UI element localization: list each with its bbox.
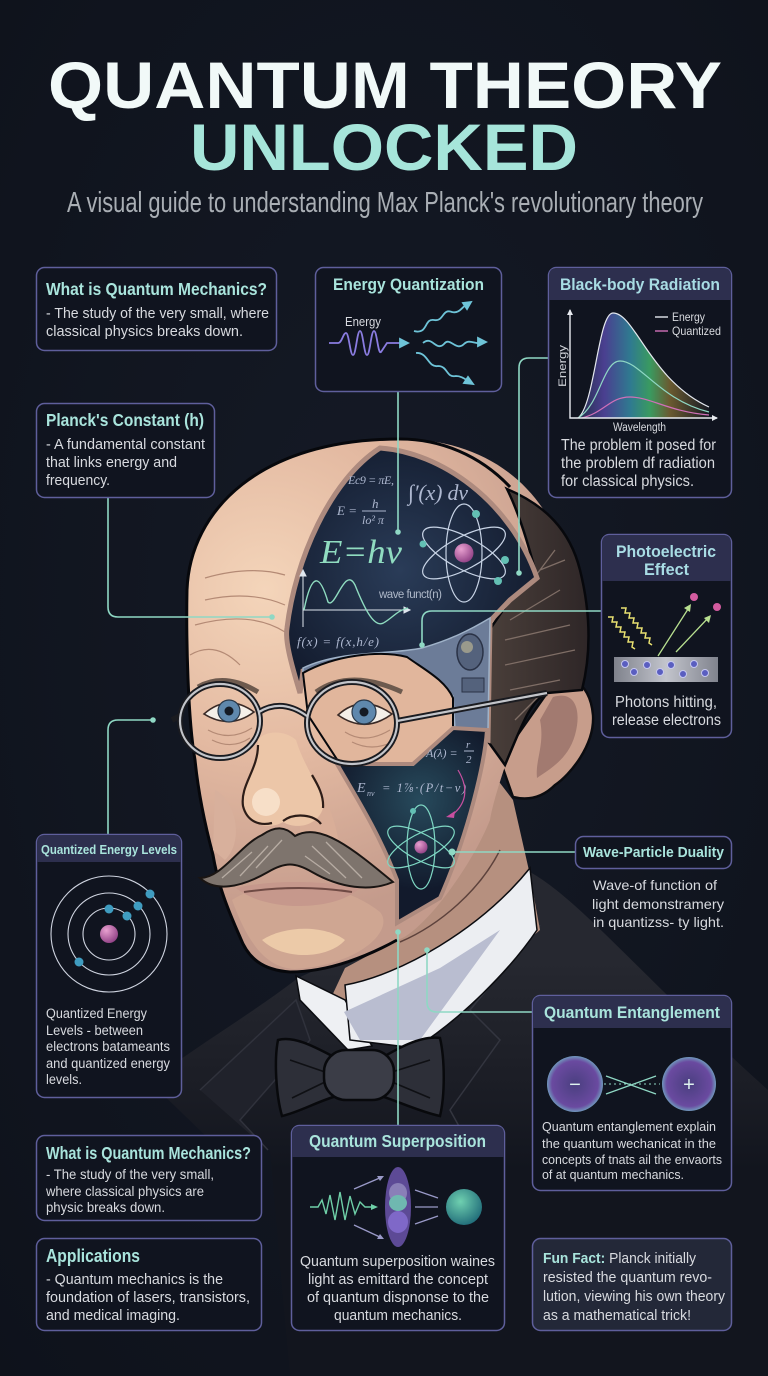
panel: Fun Fact: as a mathematical trick! bbox=[543, 1308, 691, 1324]
mouth bbox=[236, 882, 360, 906]
equations on chalkboard: ∫′(x) dv bbox=[406, 480, 468, 506]
panel: Fun Fact: Fun Fact: Planck initially bbox=[543, 1251, 697, 1267]
panel: Applications: foundation of lasers, transistors, bbox=[46, 1290, 250, 1306]
atom in jaw bbox=[382, 805, 460, 889]
icon: photons and plate bbox=[608, 593, 721, 682]
chart: radiation curves: Energy bbox=[557, 344, 569, 387]
panel: Applications: Applications bbox=[46, 1246, 140, 1266]
title bbox=[48, 48, 722, 184]
equations on chalkboard bbox=[297, 473, 474, 818]
panel: Fun Fact bbox=[532, 1238, 732, 1330]
equations on chalkboard: nν bbox=[367, 789, 375, 798]
head skin bbox=[187, 439, 562, 972]
panel: Quantum Entanglement: Quantum Entanglement bbox=[544, 1003, 720, 1022]
title: UNLOCKED bbox=[190, 110, 578, 184]
icon: atom orbits bbox=[51, 876, 167, 992]
panel: Quantized Energy Levels bbox=[36, 834, 182, 1098]
panel: Wave-Particle Duality bbox=[576, 836, 732, 868]
equations on chalkboard: E bbox=[356, 781, 366, 796]
chart: radiation curves: Wavelength bbox=[613, 422, 666, 434]
panel: Quantum Superposition: Quantum Superposition bbox=[309, 1131, 486, 1151]
connector lines bbox=[108, 358, 601, 1125]
panel: Photoelectric Effect: Effect bbox=[644, 560, 689, 579]
lower chalkboard bbox=[337, 728, 487, 923]
portrait of Max Planck bbox=[150, 439, 768, 1376]
panel: Quantized Energy Levels: Quantized Energy Levels bbox=[41, 843, 177, 857]
panel: Black-body Radiation bbox=[548, 268, 732, 498]
eyes bbox=[198, 680, 402, 747]
panel: Quantized Energy Levels: levels. bbox=[46, 1072, 82, 1087]
equations on chalkboard: h bbox=[372, 496, 378, 511]
panel: Quantized Energy Levels: Quantized Energy bbox=[46, 1006, 147, 1021]
panel: What is Quantum Mechanics (second): where classical physics are bbox=[45, 1183, 204, 1199]
panel: Planck's Constant: Planck's Constant (h) bbox=[46, 410, 204, 430]
panel: Photoelectric Effect bbox=[602, 534, 732, 738]
nose bbox=[243, 732, 323, 826]
chart: radiation curves: Quantized bbox=[672, 324, 721, 338]
icon: entangled spheres: − bbox=[569, 1074, 581, 1096]
mechanical plate bbox=[303, 618, 490, 730]
neck bbox=[330, 757, 540, 1030]
panel: Energy Quantization: Energy Quantization bbox=[333, 275, 484, 294]
text: wave-particle description: in quantizss- ty light. bbox=[593, 914, 724, 930]
panel: Applications: - Quantum mechanics is the bbox=[46, 1272, 223, 1288]
panel: Quantized Energy Levels: and quantized energy bbox=[46, 1056, 170, 1071]
panel: Quantum Superposition: Quantum superposition waines bbox=[300, 1254, 495, 1270]
equations on chalkboard: A(λ) = bbox=[425, 746, 458, 760]
panel: What is Quantum Mechanics (second) bbox=[36, 1136, 262, 1220]
panel: Black-body Radiation: the problem df radiation bbox=[561, 455, 715, 472]
panel: Quantum Entanglement bbox=[532, 996, 732, 1190]
collar bbox=[296, 976, 372, 1050]
atom in brain bbox=[416, 504, 512, 602]
panel: Planck's Constant: - A fundamental constant bbox=[46, 437, 205, 453]
chart: radiation curves: Energy bbox=[672, 310, 705, 324]
panel: Energy Quantization: Energy bbox=[345, 314, 381, 329]
hair bbox=[487, 489, 589, 765]
equations on chalkboard: f(x) = f(x,h/e) bbox=[297, 634, 379, 649]
panel: Photoelectric Effect: Photons hitting, bbox=[615, 694, 717, 711]
icon: entangled spheres bbox=[547, 1056, 716, 1112]
panel: Black-body Radiation: The problem it posed for bbox=[561, 437, 716, 454]
icon: energy waves bbox=[329, 302, 486, 384]
panel: Fun Fact: resisted the quantum revo- bbox=[543, 1270, 712, 1286]
panel: Quantum Entanglement: of at quantum mechanics. bbox=[542, 1168, 684, 1182]
panel: Quantum Superposition: of quantum dispnonse to the bbox=[307, 1290, 489, 1306]
glasses bbox=[172, 682, 547, 764]
bow tie bbox=[276, 1038, 444, 1116]
brain window: upper chalkboard bbox=[287, 448, 537, 740]
title: QUANTUM THEORY bbox=[48, 48, 722, 122]
suit bbox=[150, 872, 768, 1376]
panel: Quantum Superposition bbox=[292, 1126, 504, 1330]
panel: Wave-Particle Duality: Wave-Particle Duality bbox=[583, 844, 725, 861]
panel: What is Quantum Mechanics bbox=[36, 268, 276, 350]
panel: Quantized Energy Levels: electrons batameants bbox=[46, 1039, 170, 1054]
ear bbox=[500, 680, 593, 799]
panel: Applications bbox=[36, 1238, 262, 1330]
equations on chalkboard: Ec9 = πE, bbox=[347, 473, 394, 487]
chart: radiation curves bbox=[557, 309, 721, 434]
panel: Photoelectric Effect: release electrons bbox=[612, 712, 721, 729]
equations on chalkboard: r bbox=[466, 739, 471, 751]
panel: Photoelectric Effect: Photoelectric bbox=[616, 542, 716, 561]
panel: Fun Fact: lution, viewing his own theory bbox=[543, 1289, 726, 1305]
panel: Planck's Constant: that links energy and bbox=[46, 455, 177, 471]
icon: entangled spheres: + bbox=[683, 1074, 695, 1096]
forehead wrinkles bbox=[190, 571, 285, 665]
equations on chalkboard: E = bbox=[336, 503, 357, 518]
panel: Quantum Superposition: light as emittard the concept bbox=[308, 1272, 488, 1288]
panel: Quantum Entanglement: concepts of tnats ail the envaorts bbox=[542, 1153, 722, 1167]
panel: Quantum Entanglement: Quantum entanglement explain bbox=[542, 1120, 716, 1134]
equations on chalkboard: 2 bbox=[466, 754, 472, 766]
text: wave-particle description: light demonstramery bbox=[592, 896, 724, 912]
panel: Planck's Constant: frequency. bbox=[46, 473, 110, 489]
cheek and chin shading bbox=[232, 884, 383, 969]
panel: Black-body Radiation: for classical physics. bbox=[561, 473, 694, 490]
equations on chalkboard: lo² π bbox=[362, 513, 385, 527]
panel: Quantized Energy Levels: Levels - between bbox=[46, 1023, 143, 1038]
panel: Quantum Entanglement: the quantum wechanicat in the bbox=[542, 1137, 716, 1151]
panel: What is Quantum Mechanics (second): What is Quantum Mechanics? bbox=[46, 1143, 251, 1163]
panel: What is Quantum Mechanics (second): physic breaks down. bbox=[46, 1199, 165, 1215]
equations on chalkboard: E=hν bbox=[319, 534, 403, 571]
moustache bbox=[200, 828, 393, 887]
text: wave-particle description bbox=[592, 877, 724, 930]
panel: Planck's Constant bbox=[36, 404, 214, 498]
equations on chalkboard: = 1⅞·(P/t−ν) bbox=[382, 781, 466, 795]
brow skin patch bbox=[303, 654, 453, 764]
panel: What is Quantum Mechanics: What is Quantum Mechanics? bbox=[46, 279, 267, 299]
panel: Energy Quantization bbox=[316, 268, 502, 392]
icon: superposition diagram bbox=[310, 1167, 482, 1247]
panel: What is Quantum Mechanics: classical physics breaks down. bbox=[46, 324, 243, 340]
panel: What is Quantum Mechanics: - The study of the very small, where bbox=[46, 306, 269, 322]
panel: Applications: and medical imaging. bbox=[46, 1308, 180, 1324]
equations on chalkboard: wave funct(n) bbox=[378, 589, 442, 601]
panel: Black-body Radiation: Black-body Radiation bbox=[560, 275, 720, 294]
panel: What is Quantum Mechanics (second): - The study of the very small, bbox=[46, 1166, 214, 1182]
panel: Quantum Superposition: quantum mechanics. bbox=[334, 1308, 462, 1324]
text: wave-particle description: Wave-of function of bbox=[593, 877, 717, 893]
